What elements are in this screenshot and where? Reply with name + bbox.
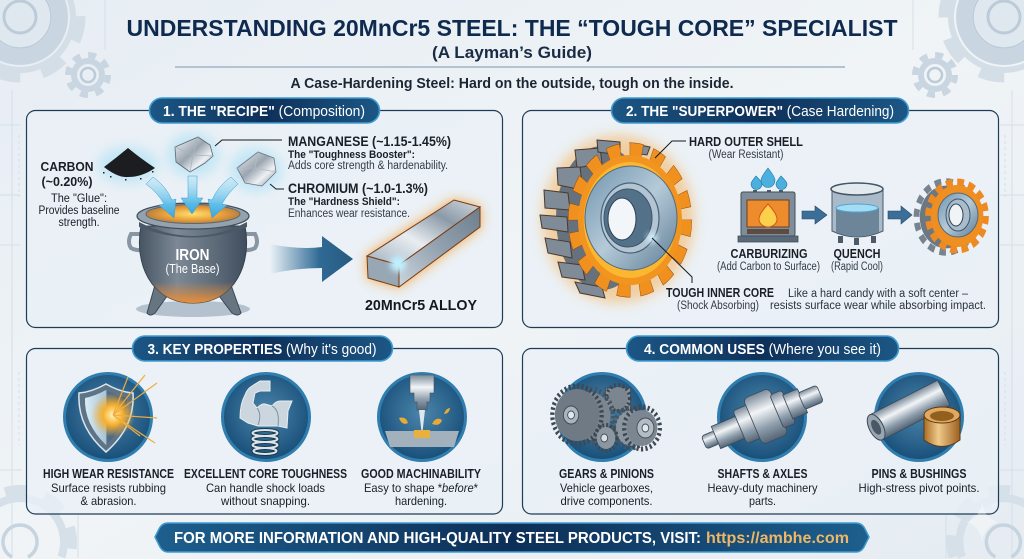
text: gears: drive components.: [560, 494, 652, 508]
text: analogy: Like a hard candy with a soft center –: [788, 288, 969, 300]
heading: superpower: [612, 98, 908, 123]
text: carbon: CARBON: [40, 159, 94, 174]
gear: bottom left: [0, 490, 72, 557]
text: hard outer shell: (Wear Resistant): [708, 149, 784, 161]
heading: uses: 4. COMMON USES (Where you see it): [644, 342, 881, 358]
label: iron: IRON: [176, 247, 210, 264]
text: carburizing: (Add Carbon to Surface): [717, 261, 820, 273]
title: UNDERSTANDING 20MnCr5 STEEL: THE “TOUGH CORE” SPECIALIST: [126, 15, 898, 41]
icon: carbon pile: [103, 148, 155, 180]
icon: drill: [378, 374, 466, 460]
text: carbon: Provides baseline: [38, 205, 120, 217]
text: manganese: [288, 134, 451, 172]
text: analogy: [770, 288, 986, 312]
gear: top right small: [915, 55, 955, 95]
label: iron: [166, 247, 220, 276]
icon: gears: [552, 374, 660, 460]
icon: alloy ingot: [367, 200, 480, 287]
text: analogy: resists surface wear while absorbing impact.: [770, 300, 986, 312]
text: tough inner core: (Shock Absorbing): [677, 300, 759, 312]
text: pins: High-stress pivot points.: [858, 481, 980, 495]
icon: furnace: [738, 190, 798, 242]
text: pins: PINS & BUSHINGS: [872, 467, 966, 481]
icon: shield: [64, 374, 157, 460]
text: shafts: SHAFTS & AXLES: [718, 467, 808, 481]
footer banner: FOR MORE INFORMATION AND HIGH-QUALITY STEEL PRODUCTS, VISIT:: [174, 530, 701, 547]
text: machinability: hardening.: [395, 494, 447, 508]
text: wear resistance: HIGH WEAR RESISTANCE: [43, 467, 174, 481]
arrow: to quench: [802, 206, 827, 224]
text: core toughness: without snapping.: [220, 494, 310, 508]
footer banner: https://ambhe.com: [706, 530, 849, 547]
text: tough inner core: [666, 286, 774, 312]
gear: top right: [938, 0, 1024, 82]
text: manganese: The "Toughness Booster":: [288, 149, 415, 161]
text: shafts: parts.: [749, 494, 776, 508]
text: tough inner core: TOUGH INNER CORE: [666, 286, 774, 300]
heading: recipe: 1. THE "RECIPE" (Composition): [163, 104, 365, 120]
gear: bottom right: [951, 490, 1024, 557]
text: carburizing: CARBURIZING: [730, 247, 808, 261]
arrows into cauldron: [146, 176, 238, 218]
text: gears: GEARS & PINIONS: [559, 467, 654, 481]
icon: muscle and spring: [222, 374, 310, 460]
text: wear resistance: & abrasion.: [80, 494, 136, 508]
panel: recipe: [26, 98, 502, 328]
text: core toughness: Can handle shock loads: [206, 481, 325, 495]
footer banner: [155, 523, 869, 552]
text: hard outer shell: [689, 135, 803, 161]
panel: key properties: [26, 336, 502, 514]
text: wear resistance: Surface resists rubbing: [51, 481, 166, 495]
icon: carbon droplets: [751, 168, 787, 190]
icon: blue glow behind ingredients: [98, 133, 282, 192]
text: chromium: Enhances wear resistance.: [288, 208, 410, 220]
text: carbon: [38, 159, 120, 229]
text: carbon: The "Glue":: [51, 193, 107, 205]
heading: superpower: 2. THE "SUPERPOWER" (Case Hardening): [626, 104, 894, 120]
text: chromium: [288, 181, 428, 220]
text: chromium: The "Hardness Shield":: [288, 196, 400, 208]
text: carbon: (~0.20%): [42, 174, 92, 189]
icon: quench tank: [831, 183, 883, 245]
text: quench: QUENCH: [834, 247, 880, 261]
leader lines: ingredients: [215, 140, 284, 189]
text: manganese: Adds core strength & hardenability.: [288, 160, 448, 172]
text: shafts: [708, 467, 818, 508]
text: chromium: CHROMIUM (~1.0-1.3%): [288, 181, 428, 196]
watermark sparkle: [966, 502, 998, 542]
text: quench: [831, 247, 883, 273]
arrow: to finished gear: [888, 206, 912, 224]
icon: shaft: [694, 370, 830, 466]
text: machinability: [361, 467, 482, 508]
icon: chromium lump: [237, 152, 276, 186]
text: manganese: MANGANESE (~1.15-1.45%): [288, 134, 451, 149]
panel: common uses: [522, 336, 998, 514]
heading: properties: [132, 336, 392, 361]
heading: uses: [626, 336, 898, 361]
icon: manganese lump: [175, 137, 213, 172]
text: machinability: GOOD MACHINABILITY: [361, 467, 482, 481]
arrow: to alloy: [270, 236, 353, 282]
heading: recipe: [150, 98, 380, 123]
tagline: A Case-Hardening Steel: Hard on the outside, tough on the inside.: [290, 76, 734, 92]
text: carbon: strength.: [58, 217, 100, 229]
text: core toughness: [184, 467, 347, 508]
subtitle: (A Layman’s Guide): [432, 43, 592, 62]
text: gears: Vehicle gearboxes,: [560, 481, 653, 495]
text: carburizing: [717, 247, 820, 273]
icon: cauldron: [129, 203, 257, 317]
gear: top left small: [68, 55, 108, 95]
title divider: [175, 66, 845, 68]
panel: superpower: [522, 98, 998, 328]
text: quench: (Rapid Cool): [831, 261, 883, 273]
text: wear resistance: [43, 467, 174, 508]
gear: top left: [0, 0, 86, 82]
heading: properties: 3. KEY PROPERTIES (Why it's good): [148, 342, 376, 358]
text: shafts: Heavy-duty machinery: [708, 481, 818, 495]
text: hard outer shell: HARD OUTER SHELL: [689, 135, 803, 149]
label: alloy: 20MnCr5 ALLOY: [365, 297, 477, 314]
icon: large gear: [540, 135, 694, 303]
label: iron: (The Base): [166, 262, 220, 276]
text: gears: [559, 467, 654, 508]
text: pins: [858, 467, 980, 495]
icon: finished gear: [916, 182, 986, 252]
text: machinability: Easy to shape *before*: [364, 481, 478, 495]
leader lines: gear: [652, 141, 692, 283]
icon: pin and bushing: [864, 374, 962, 460]
text: core toughness: EXCELLENT CORE TOUGHNESS: [184, 467, 347, 481]
